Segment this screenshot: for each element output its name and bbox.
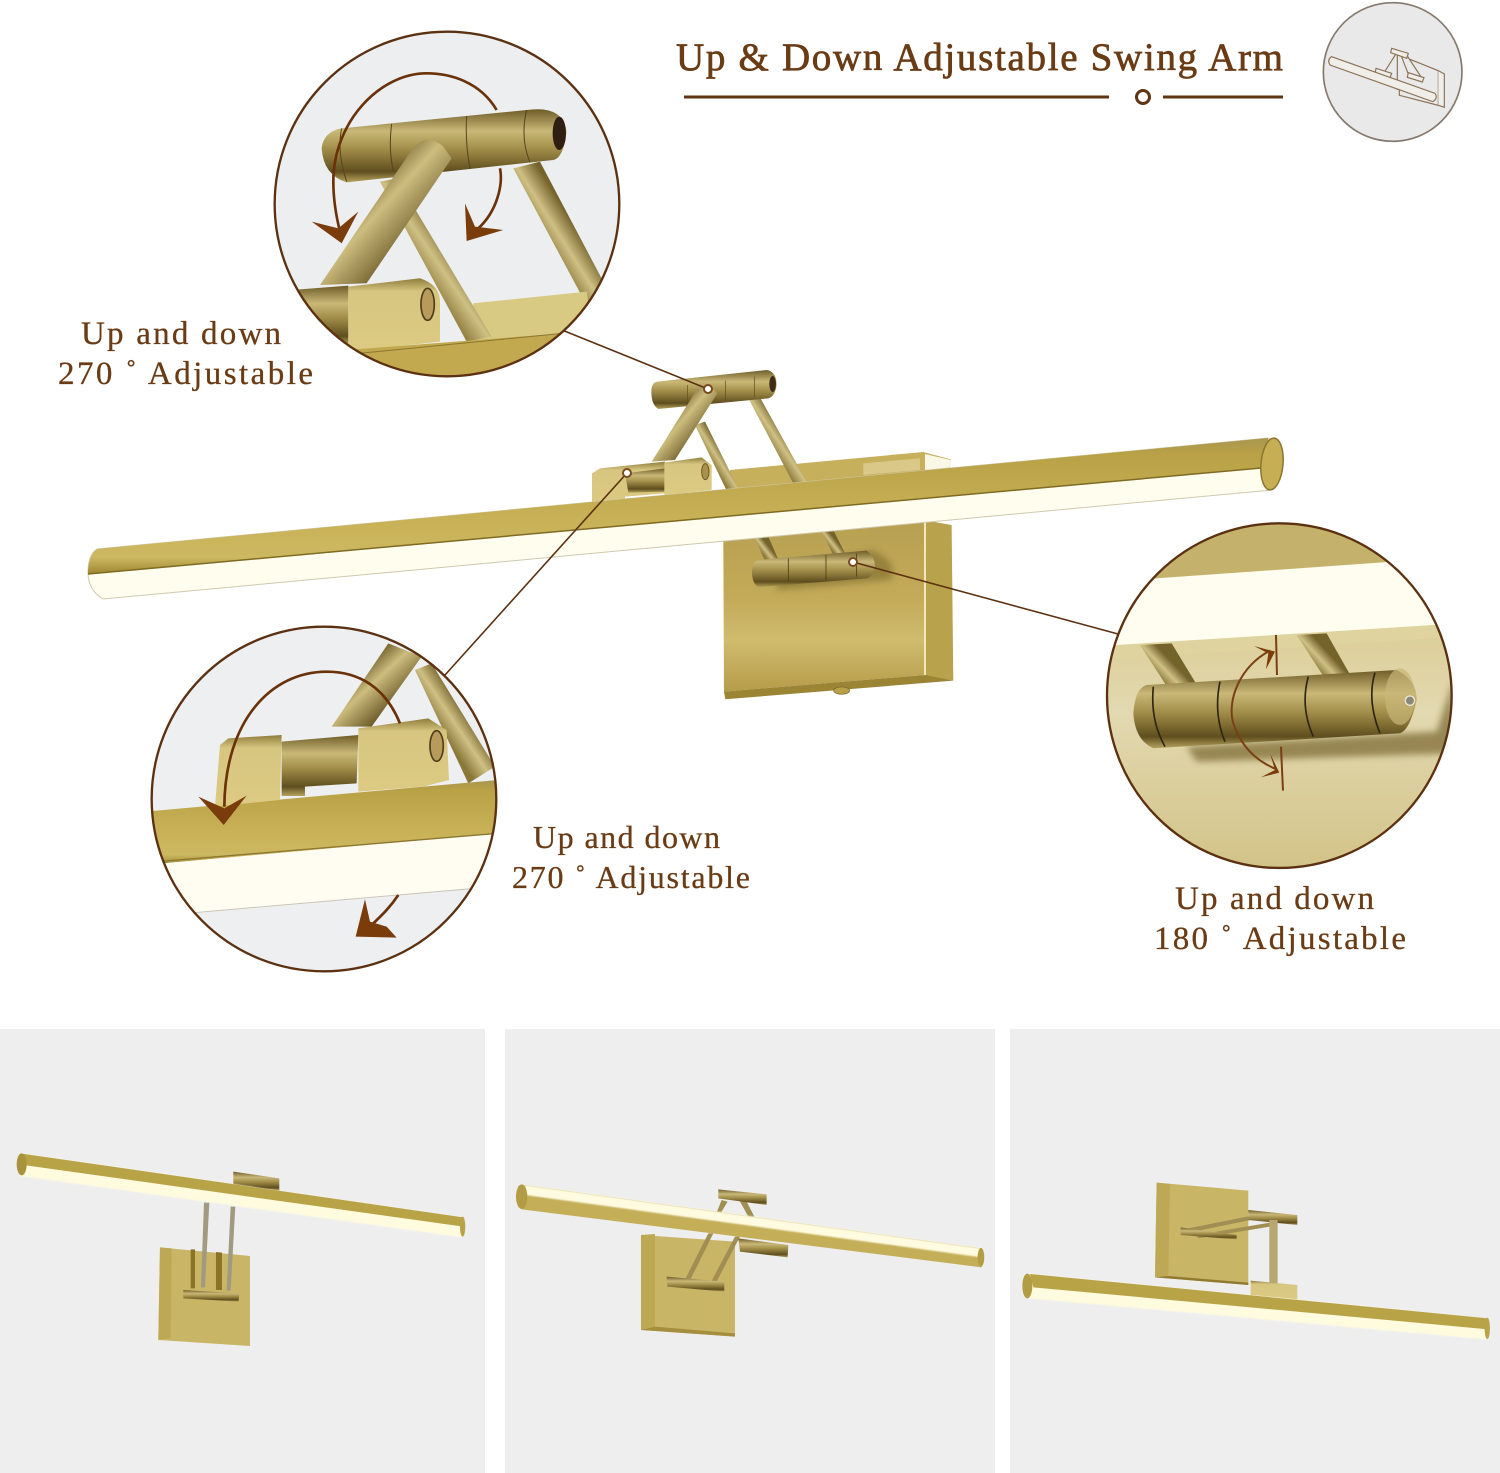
icon: swing arm lamp in circle <box>1323 3 1462 141</box>
label: lower bracket <box>512 819 750 895</box>
lamp barrel photo <box>1100 520 1460 762</box>
label: wall barrel: 180 ˚ Adjustable <box>1154 921 1406 957</box>
label: top joint: Up and down <box>81 316 281 352</box>
main lamp <box>88 370 1285 699</box>
panel: top swing joint detail <box>270 32 619 392</box>
label: lower bracket: Up and down <box>533 819 720 855</box>
panel: lamp position three <box>1010 1029 1500 1473</box>
rotation arrow <box>1232 635 1283 791</box>
title text: Up & Down Adjustable Swing Arm <box>676 36 1283 79</box>
swing arm <box>592 370 807 508</box>
lamp joint photo <box>298 109 602 376</box>
panel: lamp position one <box>0 1029 485 1473</box>
connector dots <box>623 385 857 566</box>
label: top joint: 270 ˚ Adjustable <box>58 356 313 392</box>
connector lines <box>445 330 1118 675</box>
rotation arrow <box>198 672 400 938</box>
panel: wall barrel detail <box>1100 520 1460 868</box>
mini lamp one <box>17 1153 465 1346</box>
title underline <box>684 90 1283 104</box>
wall plate <box>723 520 953 699</box>
mini lamp two <box>516 1184 984 1337</box>
label: lower bracket: 270 ˚ Adjustable <box>512 859 750 895</box>
mini lamp three <box>1022 1183 1490 1339</box>
lamp bracket photo <box>145 643 498 920</box>
rotation arrow <box>312 73 503 243</box>
wall plate upper edge <box>730 452 951 500</box>
label: wall barrel <box>1154 881 1406 957</box>
title <box>676 36 1283 104</box>
light tube <box>88 437 1285 599</box>
panel: lower bracket detail <box>145 627 498 971</box>
panel: lamp position two <box>505 1029 995 1473</box>
label: top joint <box>58 316 313 392</box>
label: wall barrel: Up and down <box>1175 881 1374 917</box>
